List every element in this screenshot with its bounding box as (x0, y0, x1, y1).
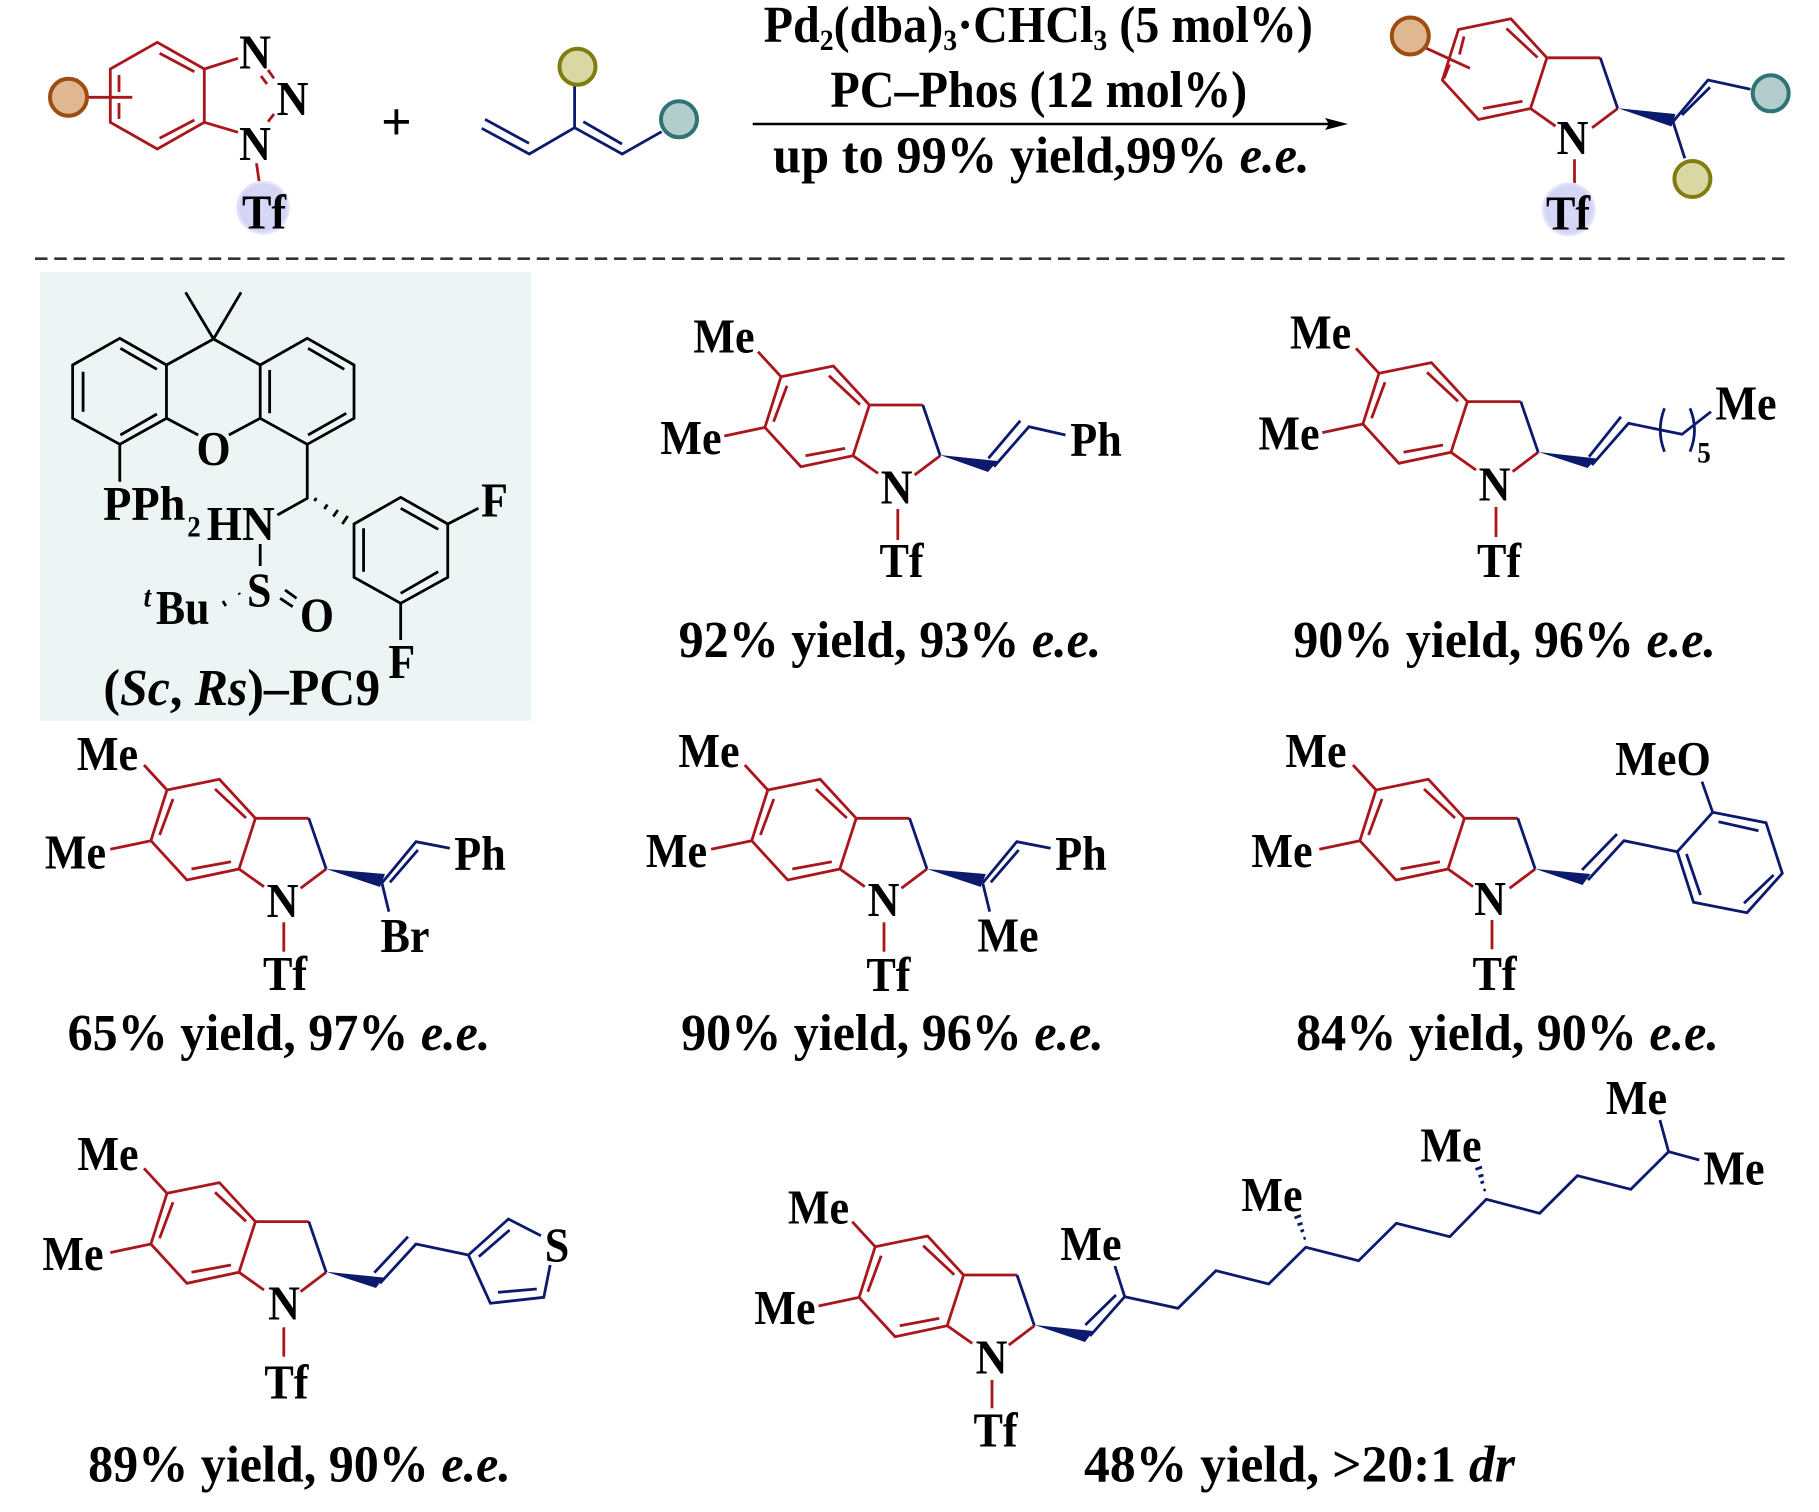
indoline scaffold (110, 765, 326, 888)
triflyl highlight (1542, 182, 1596, 236)
catalyst line: 3 (943, 24, 957, 57)
label N: N (268, 1276, 300, 1331)
reagent: 1,3-diene (482, 49, 697, 154)
atom label N1: N (239, 25, 271, 80)
catalyst line: 3 (1093, 24, 1107, 57)
compound: octenyl indoline 90% yield (1258, 305, 1777, 669)
side chain bonds (992, 1120, 1699, 1408)
label N: N (1474, 872, 1506, 927)
substituent circle: olive (1674, 161, 1710, 197)
indoline scaffold (818, 1222, 1034, 1345)
label Tf: Tf (866, 948, 911, 1003)
yield caption: 84% yield, 90% e.e. (1296, 1005, 1719, 1062)
side chain bonds (898, 421, 1066, 540)
indoline scaffold (724, 352, 940, 475)
label Me: Me (77, 1127, 139, 1182)
label Br: Br (381, 909, 429, 964)
yield caption: 48% yield, >20:1 dr (1084, 1437, 1516, 1494)
label Me: Me (1703, 1141, 1765, 1196)
label Me: Me (678, 724, 740, 779)
atom label O: O (196, 423, 231, 477)
label Me: Me (1258, 406, 1320, 461)
plus sign: + (381, 92, 412, 152)
ligand name: (Sc, Rs)–PC9 (103, 660, 380, 717)
label Tf: Tf (1477, 534, 1522, 589)
side chain bonds (1496, 408, 1711, 537)
label Ph: Ph (1055, 827, 1107, 882)
label Me: Me (1606, 1071, 1667, 1126)
label MeO: MeO (1615, 732, 1711, 787)
label Ph: Ph (1070, 413, 1122, 468)
side chain bonds (1426, 48, 1750, 189)
xanthene skeleton bonds (73, 292, 354, 515)
label subscript 5: 5 (1697, 437, 1711, 470)
label Me: Me (788, 1180, 849, 1235)
catalyst line: 2 (820, 24, 834, 57)
substituent circle: orange (1392, 18, 1429, 54)
side chain bonds (284, 1219, 550, 1357)
label Me: Me (1060, 1217, 1122, 1272)
difluorophenyl bonds (354, 497, 478, 640)
atom label Tf: Tf (242, 185, 287, 240)
superscript t: t (144, 581, 152, 614)
label N: N (1479, 457, 1511, 512)
atom label N3: N (239, 117, 271, 172)
label Me: Me (646, 824, 707, 879)
reaction conditions (753, 0, 1348, 185)
atom label N2: N (277, 72, 309, 127)
reagent: N-triflyl benzotriazole (50, 25, 309, 240)
indoline scaffold (711, 765, 927, 888)
benzotriazole bonds (87, 42, 274, 192)
indoline scaffold (1442, 19, 1618, 128)
label N: N (881, 461, 913, 515)
panel background (40, 272, 531, 721)
atom label Bu: Bu (156, 582, 210, 636)
label Tf: Tf (264, 1355, 309, 1410)
atom label S: S (247, 565, 271, 618)
yield caption: 89% yield, 90% e.e. (88, 1437, 511, 1494)
compound: 2-methoxystyryl indoline 84% yield (1251, 724, 1782, 1062)
label Me: Me (693, 310, 755, 364)
side chain bonds (884, 842, 1051, 952)
indoline scaffold (1322, 348, 1538, 472)
label N: N (976, 1330, 1008, 1385)
yield caption: 90% yield, 96% e.e. (681, 1005, 1104, 1062)
yield caption: 65% yield, 97% e.e. (68, 1005, 490, 1062)
label Me: Me (45, 825, 106, 880)
label Me: Me (1715, 376, 1777, 431)
reaction arrow (753, 118, 1348, 130)
compound: bromo vinyl indoline 65% yield (45, 727, 506, 1062)
label Tf: Tf (1472, 947, 1517, 1002)
label N: N (868, 873, 900, 928)
ligand line: PC–Phos (12 mol%) (830, 60, 1247, 118)
label Tf: Tf (263, 947, 308, 1002)
label Me: Me (977, 909, 1039, 963)
compound: thienyl vinyl indoline 89% yield (42, 1127, 569, 1494)
side chain bonds (1492, 782, 1782, 949)
label Me: Me (1285, 724, 1347, 779)
side chain bonds (284, 842, 450, 952)
subscript 2: 2 (187, 511, 201, 544)
compound: styryl indoline 92% yield (660, 310, 1122, 669)
panel: chiral ligand PC9 (40, 272, 531, 721)
stereo hash and sulfinyl bonds (223, 498, 348, 607)
compound: phytyl-type indoline 48% yield (754, 1071, 1765, 1494)
atom label N: N (1557, 111, 1589, 166)
indoline scaffold (110, 1168, 326, 1292)
compound: methyl vinyl indoline 90% yield (646, 724, 1107, 1062)
triflyl highlight (236, 181, 290, 235)
substituent circle: teal (661, 101, 697, 137)
result line: up to 99% yield,99% e.e. (773, 127, 1310, 185)
diene bonds (482, 85, 662, 154)
label Me: Me (42, 1227, 104, 1282)
label N: N (267, 874, 299, 929)
atom label O of sulfinyl: O (300, 590, 334, 643)
indoline scaffold (1319, 765, 1535, 888)
label Me: Me (660, 411, 722, 466)
label Me: Me (1241, 1168, 1303, 1223)
atom label HN: HN (207, 497, 275, 551)
label Me: Me (754, 1281, 816, 1336)
atom label F right: F (481, 475, 508, 528)
label Ph: Ph (454, 827, 506, 882)
substituent circle: orange (50, 79, 87, 116)
atom label F bottom: F (388, 636, 415, 690)
label Me: Me (1251, 824, 1313, 879)
yield caption: 92% yield, 93% e.e. (679, 612, 1101, 669)
substituent circle: teal (1753, 75, 1789, 111)
label Tf: Tf (973, 1404, 1018, 1458)
yield caption: 90% yield, 96% e.e. (1293, 612, 1716, 669)
label Me: Me (77, 727, 138, 782)
label Tf: Tf (879, 534, 924, 589)
atom label PPh2: PPh (103, 478, 185, 531)
atom label Tf: Tf (1546, 186, 1591, 241)
product: general 2-vinyl indoline (1392, 18, 1789, 241)
label S: S (545, 1219, 569, 1273)
label Me: Me (1290, 305, 1351, 360)
substituent circle: olive (560, 49, 596, 85)
label Me: Me (1420, 1118, 1482, 1173)
